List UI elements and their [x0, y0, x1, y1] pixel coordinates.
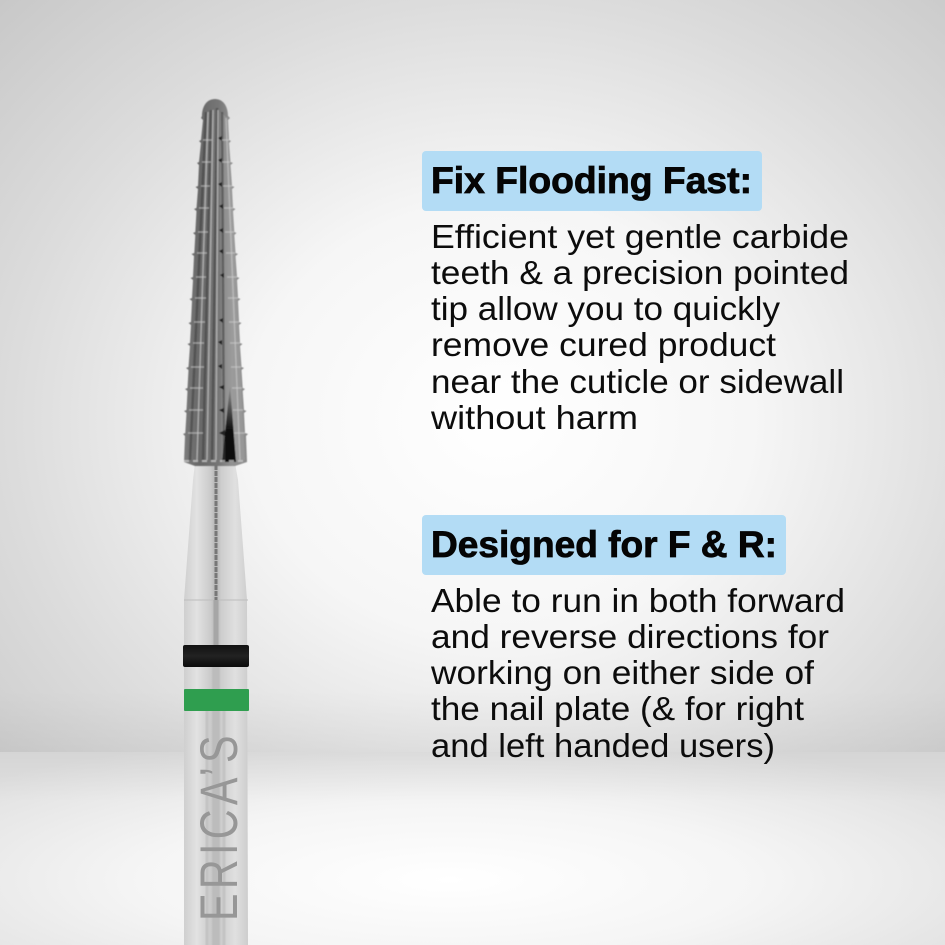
heading: Fix Flooding Fast: — [431, 160, 752, 201]
body text: and reverse directions for — [431, 619, 829, 656]
cutting head — [183, 99, 248, 466]
body text — [430, 583, 845, 765]
lit right columns — [220, 112, 245, 460]
drill bit — [183, 99, 249, 945]
body text: and left handed users) — [431, 728, 775, 765]
light ridges — [197, 110, 240, 460]
panel: fix flooding fast — [422, 151, 849, 437]
body text — [430, 219, 849, 437]
heading: Designed for F & R: — [431, 524, 777, 565]
head base edge — [184, 460, 247, 462]
flute shadow — [222, 385, 236, 462]
body text: the nail plate (& for right — [431, 691, 805, 728]
body text: Able to run in both forward — [431, 583, 845, 620]
engraved brand: ERICA’S — [190, 735, 249, 921]
green band — [184, 689, 249, 711]
body text: near the cuticle or sidewall — [431, 364, 844, 401]
body text: Efficient yet gentle carbide — [431, 219, 849, 256]
body text: tip allow you to quickly — [431, 291, 780, 328]
black band — [183, 645, 249, 667]
dark grooves — [190, 108, 224, 460]
heading pill — [422, 515, 786, 575]
body text: without harm — [430, 400, 638, 437]
bit shank — [184, 463, 248, 945]
heading pill — [422, 151, 762, 211]
tooth marks — [218, 136, 225, 436]
tooth notches — [188, 140, 245, 433]
body text: remove cured product — [431, 327, 777, 364]
body text: working on either side of — [430, 655, 815, 692]
body text: teeth & a precision pointed — [431, 255, 849, 292]
panel: designed for F & R — [422, 515, 845, 765]
